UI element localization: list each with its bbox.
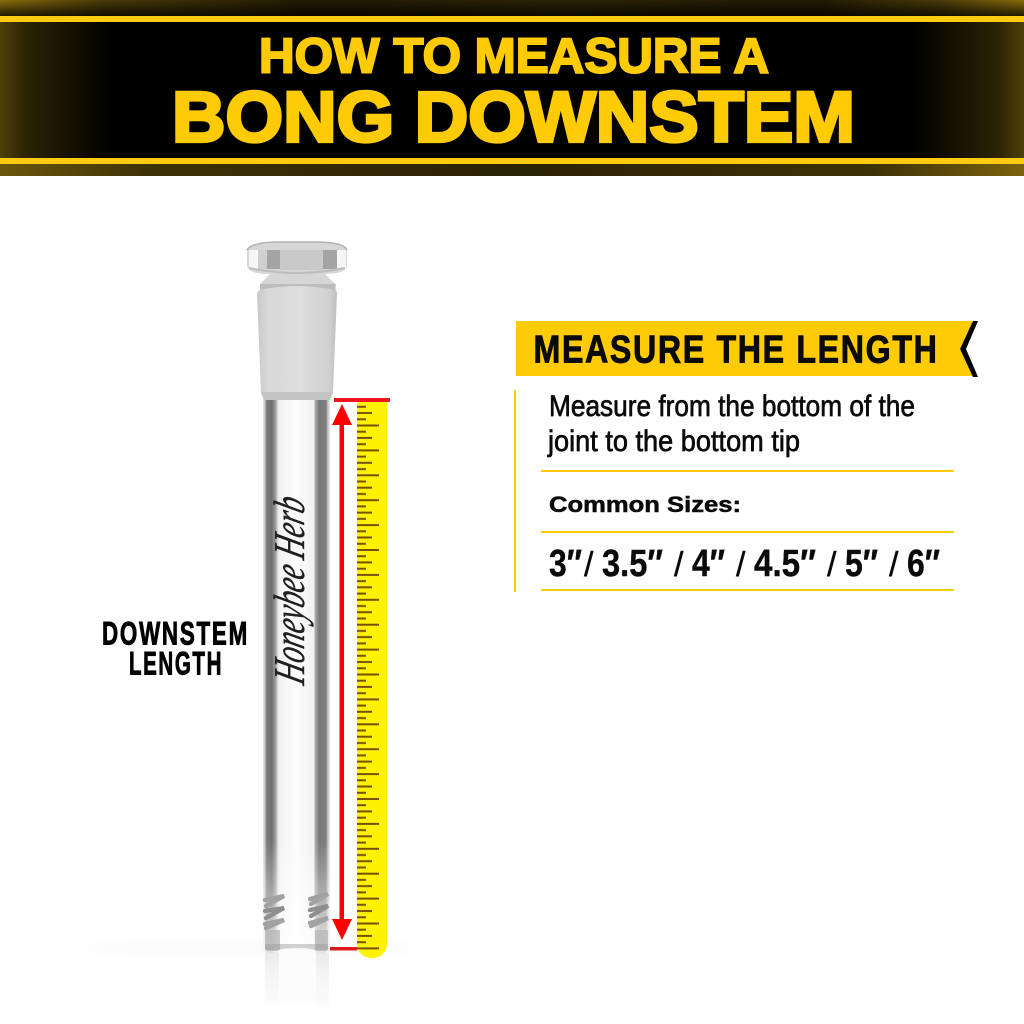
- label: downstem length: DOWNSTEM: [102, 616, 249, 652]
- logo script: Honeybee Herb: [265, 490, 314, 689]
- instruction text: [547, 390, 915, 458]
- sizes list: 6″: [907, 543, 940, 585]
- accent rule: [514, 390, 516, 592]
- sizes list: /: [674, 546, 684, 584]
- panel: measure the length: [514, 321, 978, 592]
- title line 2: BONG DOWNSTEM: [172, 78, 855, 158]
- double-headed red arrow: [332, 404, 352, 940]
- sizes list: /: [736, 546, 746, 584]
- sizes list: 4.5″: [754, 543, 816, 585]
- sizes list: /: [827, 546, 837, 584]
- sizes list: 4″: [692, 543, 725, 585]
- floor shadow: [80, 944, 420, 952]
- threads left: [265, 896, 284, 928]
- sizes list: 3.5″: [602, 543, 663, 585]
- downstem glass illustration: [247, 242, 347, 1024]
- sizes list: /: [584, 546, 594, 584]
- measurement line bottom: [330, 947, 357, 950]
- measurement line top: [334, 398, 390, 402]
- sizes list: 3″: [549, 543, 582, 585]
- common sizes label: Common Sizes:: [549, 492, 741, 517]
- label: downstem length: [102, 616, 249, 682]
- threads right: [310, 894, 328, 926]
- sizes list: /: [889, 546, 899, 584]
- stem tube: [263, 398, 330, 953]
- instruction text: Measure from the bottom of the: [549, 390, 915, 423]
- heading ribbon: [516, 321, 978, 377]
- joint: [257, 283, 337, 400]
- yellow ruler: [357, 402, 387, 958]
- sizes list: [549, 543, 940, 585]
- lower collar shading: [265, 930, 280, 951]
- heading ribbon: MEASURE THE LENGTH: [534, 328, 938, 372]
- title line 1: HOW TO MEASURE A: [259, 30, 769, 84]
- instruction text: joint to the bottom tip: [547, 425, 800, 458]
- label: downstem length: LENGTH: [129, 646, 223, 682]
- reflection: [264, 953, 329, 1024]
- header banner: [0, 0, 1024, 176]
- flared mouth: [247, 242, 347, 284]
- sizes list: 5″: [845, 543, 878, 585]
